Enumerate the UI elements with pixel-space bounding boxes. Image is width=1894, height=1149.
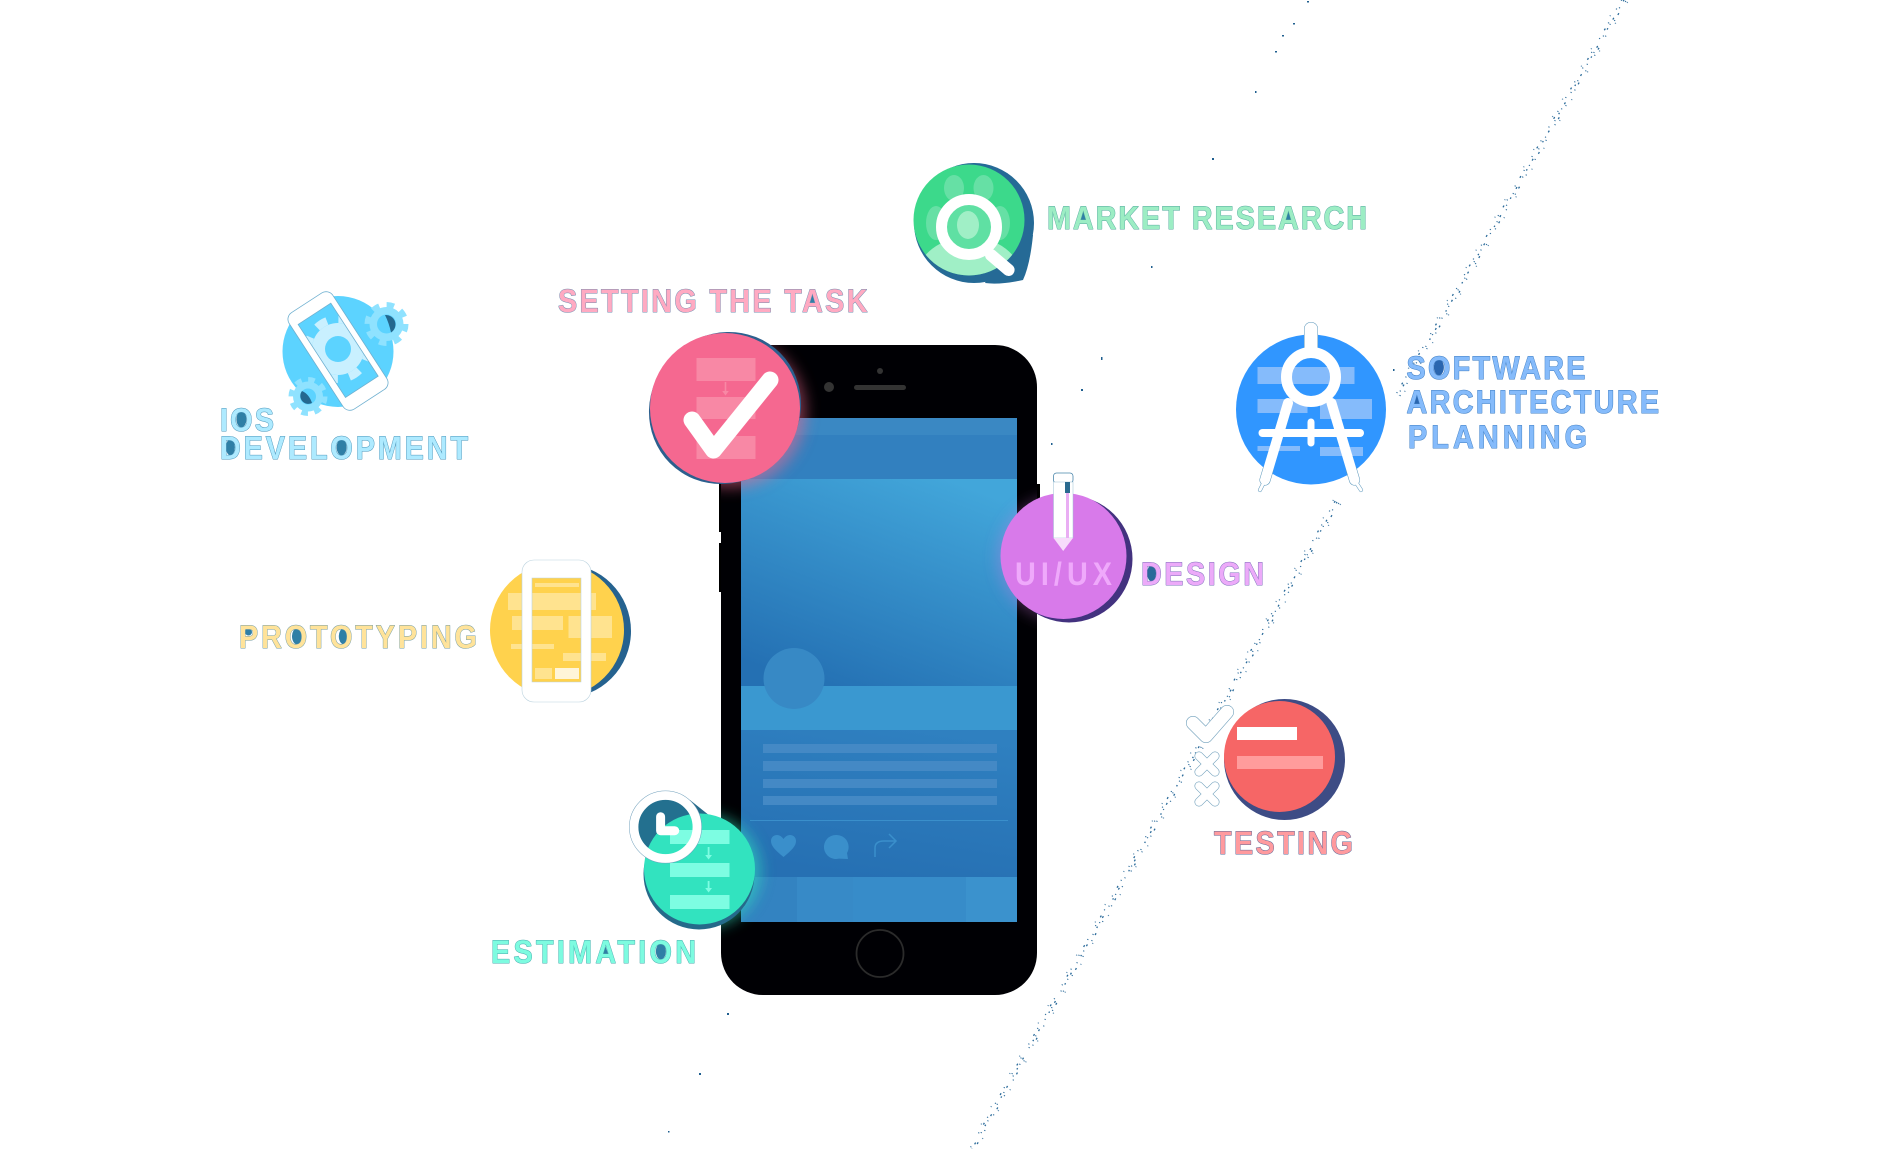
magnifier [942, 200, 1009, 270]
step: setting the task [618, 301, 832, 515]
red disc [1224, 701, 1335, 812]
label: estimation [491, 935, 696, 970]
label text: SOFTWARE [1406, 351, 1586, 386]
yellow disc [490, 563, 624, 697]
label text: PROTOTYPING [239, 620, 477, 655]
step: prototyping [490, 560, 631, 702]
blue disc [282, 296, 394, 407]
shadow [497, 564, 631, 698]
clock hands [661, 817, 675, 831]
letter counter [1147, 565, 1156, 581]
label text: DESIGN [1141, 557, 1264, 592]
icon: heart [771, 835, 796, 857]
wireframe blocks [508, 583, 612, 679]
lens interior [942, 200, 996, 254]
shadow wedge [690, 800, 710, 825]
letter counters [226, 411, 347, 455]
pink disc [650, 333, 800, 483]
step: estimation [630, 791, 755, 930]
clock face backing [634, 796, 696, 858]
label text: MARKET RESEARCH [1047, 201, 1367, 236]
label text: PLANNING [1408, 420, 1587, 455]
flow blocks [696, 358, 756, 459]
phone frame [285, 289, 391, 413]
phone side buttons [719, 483, 1040, 592]
blueprint blocks [1258, 367, 1372, 456]
coloured glows over the phone [721, 345, 1037, 936]
shadow [1224, 699, 1345, 820]
large gear on phone screen [308, 319, 368, 379]
clock ring [630, 791, 702, 863]
smartphone [719, 345, 1040, 995]
label text: DEVELOPMENT [220, 431, 468, 466]
label: market research [1047, 201, 1367, 236]
phone body [721, 345, 1037, 995]
label: design [1141, 557, 1264, 592]
step: market research [914, 163, 1034, 284]
letter counters [245, 628, 349, 644]
letter counters [601, 943, 666, 959]
task bars [1237, 727, 1297, 740]
green disc [644, 814, 755, 924]
label: testing: TESTING [1214, 826, 1353, 861]
gear lower left [291, 380, 325, 414]
blue disc [1236, 334, 1386, 484]
profile avatar [764, 648, 824, 709]
check mark [692, 380, 770, 450]
step: iOS development [282, 289, 406, 414]
label text [1406, 351, 1659, 455]
shadow [914, 163, 1034, 284]
step: testing [1193, 699, 1345, 820]
dotted diagonal line [968, 0, 1628, 1149]
compass outline [1260, 329, 1361, 490]
cross marks [1199, 756, 1215, 802]
shadow [644, 818, 754, 930]
label text: IOS [220, 403, 274, 438]
background figures [926, 175, 1012, 276]
step: software architecture planning [1236, 329, 1386, 490]
label: prototyping [239, 620, 477, 655]
camera and speaker [824, 368, 906, 392]
bottom bar [741, 877, 1017, 922]
purple disc [1000, 493, 1126, 619]
shadow [1006, 496, 1132, 622]
UI/UX lettering: UI/UX [1015, 557, 1113, 592]
phone frame [522, 560, 591, 702]
label text: ESTIMATION [491, 935, 696, 970]
text lines [763, 744, 997, 805]
step: UI/UX design [1000, 473, 1132, 622]
label: software architecture planning [1406, 351, 1659, 455]
shadow ring [618, 301, 832, 515]
flow blocks [670, 830, 730, 909]
label: setting the task [558, 284, 868, 319]
check mark [1193, 712, 1227, 736]
green disc [914, 164, 1024, 276]
home button [856, 930, 904, 977]
label: iOS development [220, 403, 468, 466]
icon: comment bubble [824, 835, 849, 859]
label text: ARCHITECTURE [1406, 385, 1659, 420]
icon: share arrow [875, 834, 896, 857]
drawing compass [1260, 329, 1361, 490]
label text: SETTING THE TASK [558, 284, 868, 319]
letter counter [809, 293, 816, 302]
scattered specks [668, 1, 1394, 1132]
gear upper right [368, 305, 406, 343]
pencil [1054, 473, 1073, 551]
letter counters [1080, 210, 1292, 220]
label text [220, 403, 468, 466]
phone screen [741, 418, 1017, 922]
letter counters [1413, 359, 1444, 404]
magnifier head figure [957, 211, 979, 239]
